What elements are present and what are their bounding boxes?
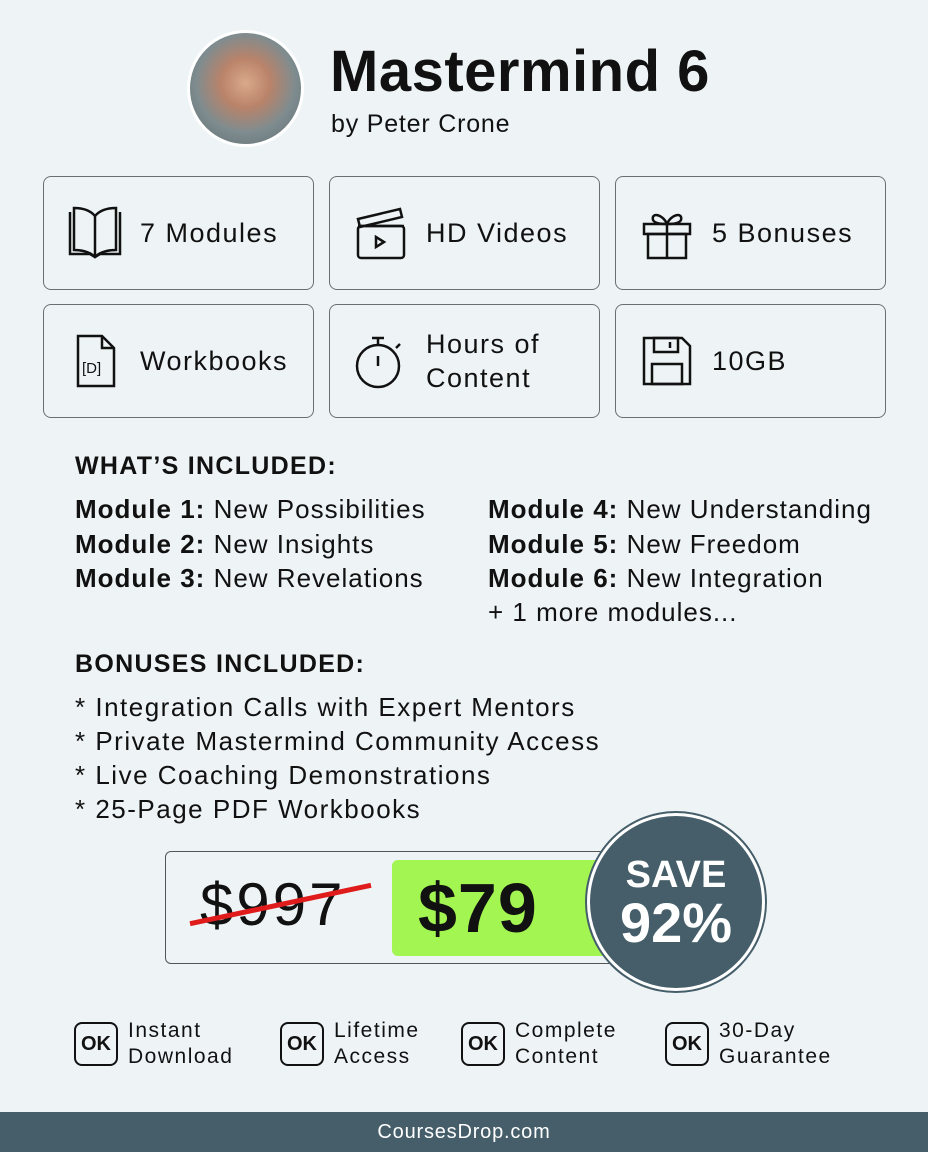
feature: hours: Content	[426, 363, 531, 393]
heading: what's included: WHAT’S INCLUDED:	[75, 452, 337, 480]
price box	[165, 851, 615, 964]
bonuses list	[75, 692, 600, 824]
text: Module 5: New Freedom	[488, 529, 801, 559]
text: OK	[468, 1032, 498, 1054]
feature: modules: 7 Modules	[140, 218, 278, 248]
title: Mastermind 6	[330, 39, 710, 104]
modules list	[75, 494, 872, 627]
text: Module 6: New Integration	[488, 563, 824, 593]
feature: videos: HD Videos	[426, 218, 568, 248]
save badge: 92%	[620, 891, 732, 954]
new price: $79	[418, 869, 538, 947]
text: Module 2: New Insights	[75, 529, 374, 559]
text: Complete	[515, 1019, 617, 1042]
text: Guarantee	[719, 1045, 832, 1068]
heading: bonuses: BONUSES INCLUDED:	[75, 650, 365, 678]
text: OK	[672, 1032, 702, 1054]
text: Download	[128, 1045, 233, 1068]
feature: bonuses	[615, 176, 886, 290]
text: OK	[81, 1032, 111, 1054]
feature: workbooks: [D]	[82, 360, 101, 377]
subtitle: by Peter Crone	[331, 110, 510, 138]
text: Instant	[128, 1019, 202, 1042]
save badge	[587, 813, 765, 991]
text: Lifetime	[334, 1019, 420, 1042]
text: Module 3: New Revelations	[75, 563, 424, 593]
text: OK	[287, 1032, 317, 1054]
guarantee badges	[74, 1019, 832, 1068]
feature: bonuses: 5 Bonuses	[712, 218, 853, 248]
feature: workbooks: Workbooks	[140, 346, 288, 376]
text: * Private Mastermind Community Access	[75, 726, 600, 756]
text: + 1 more modules...	[488, 597, 738, 627]
save badge: SAVE	[626, 854, 726, 896]
feature: hours	[329, 304, 600, 418]
feature: videos	[329, 176, 600, 290]
text: * Integration Calls with Expert Mentors	[75, 692, 576, 722]
footer: CoursesDrop.com	[377, 1121, 551, 1143]
feature: modules	[43, 176, 314, 290]
new price	[392, 860, 612, 956]
feature: size: 10GB	[712, 346, 787, 376]
text: Access	[334, 1045, 411, 1068]
text: Module 1: New Possibilities	[75, 494, 426, 524]
text: * Live Coaching Demonstrations	[75, 760, 491, 790]
footer	[0, 1112, 928, 1152]
feature: size	[615, 304, 886, 418]
text: Module 4: New Understanding	[488, 494, 872, 524]
old price: $997	[200, 871, 345, 938]
text: * 25-Page PDF Workbooks	[75, 794, 421, 824]
feature: hours: Hours of	[426, 329, 540, 359]
feature: workbooks	[43, 304, 314, 418]
avatar	[187, 30, 304, 147]
text: Content	[515, 1045, 599, 1068]
text: 30-Day	[719, 1019, 796, 1042]
